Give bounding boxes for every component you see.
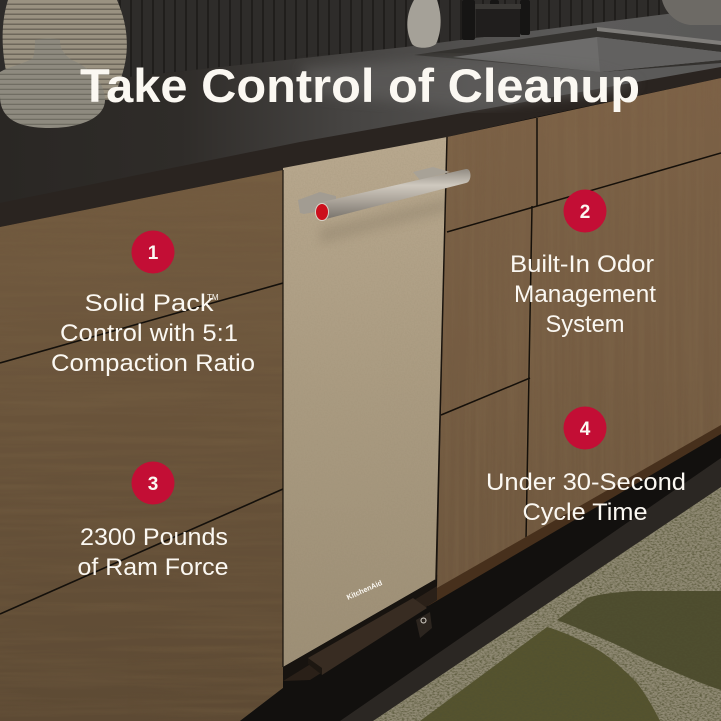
feature 2 text: [510, 251, 656, 338]
feature 1 text: TM: [207, 293, 219, 302]
feature 4 text: [486, 469, 686, 526]
dishwasher base strip: [283, 579, 437, 681]
badge 4: [564, 406, 606, 450]
red handle cap: [316, 204, 328, 220]
feature 1 text: Control with 5:1: [60, 320, 238, 347]
rug: [370, 485, 721, 721]
feature 1 text: Compaction Ratio: [51, 350, 255, 377]
feature 4 text: Under 30-Second: [486, 469, 686, 496]
cabinet seam lines: [441, 118, 721, 540]
feature 1 text: [51, 290, 255, 377]
right wood cabinets: [437, 78, 721, 598]
feature 2 text: Built-In Odor: [510, 251, 654, 278]
bowl at top right: [662, 0, 721, 25]
feature 1 text: Solid Pack: [84, 290, 215, 317]
feature 1: [51, 230, 255, 377]
cabinet seam lines: [0, 283, 283, 614]
feature 2 text: System: [546, 311, 624, 338]
faucet: [462, 0, 530, 40]
floor toe kick: [340, 458, 721, 721]
kitchen countertop: [0, 6, 721, 233]
badge 1: 1: [148, 243, 159, 264]
feature 3 text: of Ram Force: [78, 554, 228, 581]
feature 3 text: 2300 Pounds: [80, 524, 228, 551]
dishwasher front panel: [280, 130, 450, 670]
left wood cabinets: [0, 160, 283, 721]
badge 4: 4: [580, 419, 591, 440]
feature 2 text: Management: [514, 281, 656, 308]
feature 2: [510, 190, 656, 338]
rug leaf: lower: [420, 627, 660, 721]
badge 3: 3: [148, 474, 158, 495]
right cabinet trim: [428, 423, 721, 606]
badge 2: [564, 190, 606, 232]
background: dark backsplash wall: [0, 0, 721, 110]
vase: upper ribbed vase: [3, 0, 127, 100]
vase: stone vase on the back of the counter: [407, 0, 441, 48]
sink basin: [300, 27, 721, 108]
door handle: [298, 167, 470, 220]
title: Take Control of Cleanup: [80, 59, 640, 112]
kick pedal: [308, 598, 427, 675]
feature 3 text: [78, 524, 228, 581]
rug leaf: upper: [557, 591, 721, 690]
power button: [416, 612, 432, 638]
dark plinth below dishwasher: [240, 420, 721, 721]
badge 1: [132, 230, 174, 274]
feature 4: [486, 406, 686, 526]
feature 4 text: Cycle Time: [522, 499, 648, 526]
badge 2: 2: [580, 202, 590, 223]
brand logo: KitchenAid: [345, 578, 384, 602]
feature 3: [78, 462, 228, 581]
badge 3: [132, 462, 174, 504]
vase: small round vase: [0, 38, 105, 128]
